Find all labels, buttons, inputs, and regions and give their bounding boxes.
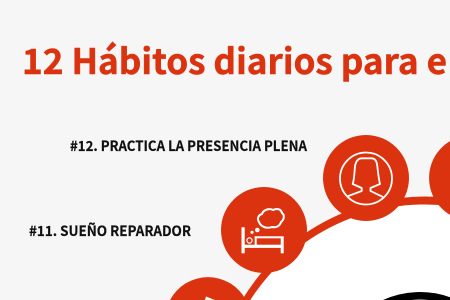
central white disc (250, 204, 450, 300)
node: habit 12 person icon (323, 135, 409, 221)
node: habit 11 sleep icon (221, 187, 307, 273)
black centre disc (383, 292, 450, 300)
title: 12 Hábitos diarios para e (22, 34, 447, 85)
label: habit 11: #11. SUEÑO REPARADOR (29, 221, 191, 241)
icon: bed with thought cloud (242, 209, 284, 253)
node: habit 10 partial (170, 277, 246, 300)
label: habit 12: #12. PRACTICA LA PRESENCIA PLENA (70, 136, 308, 156)
node: habit 1 partial (429, 141, 450, 215)
icon: woman portrait (340, 152, 392, 204)
central circle ring (242, 197, 450, 300)
